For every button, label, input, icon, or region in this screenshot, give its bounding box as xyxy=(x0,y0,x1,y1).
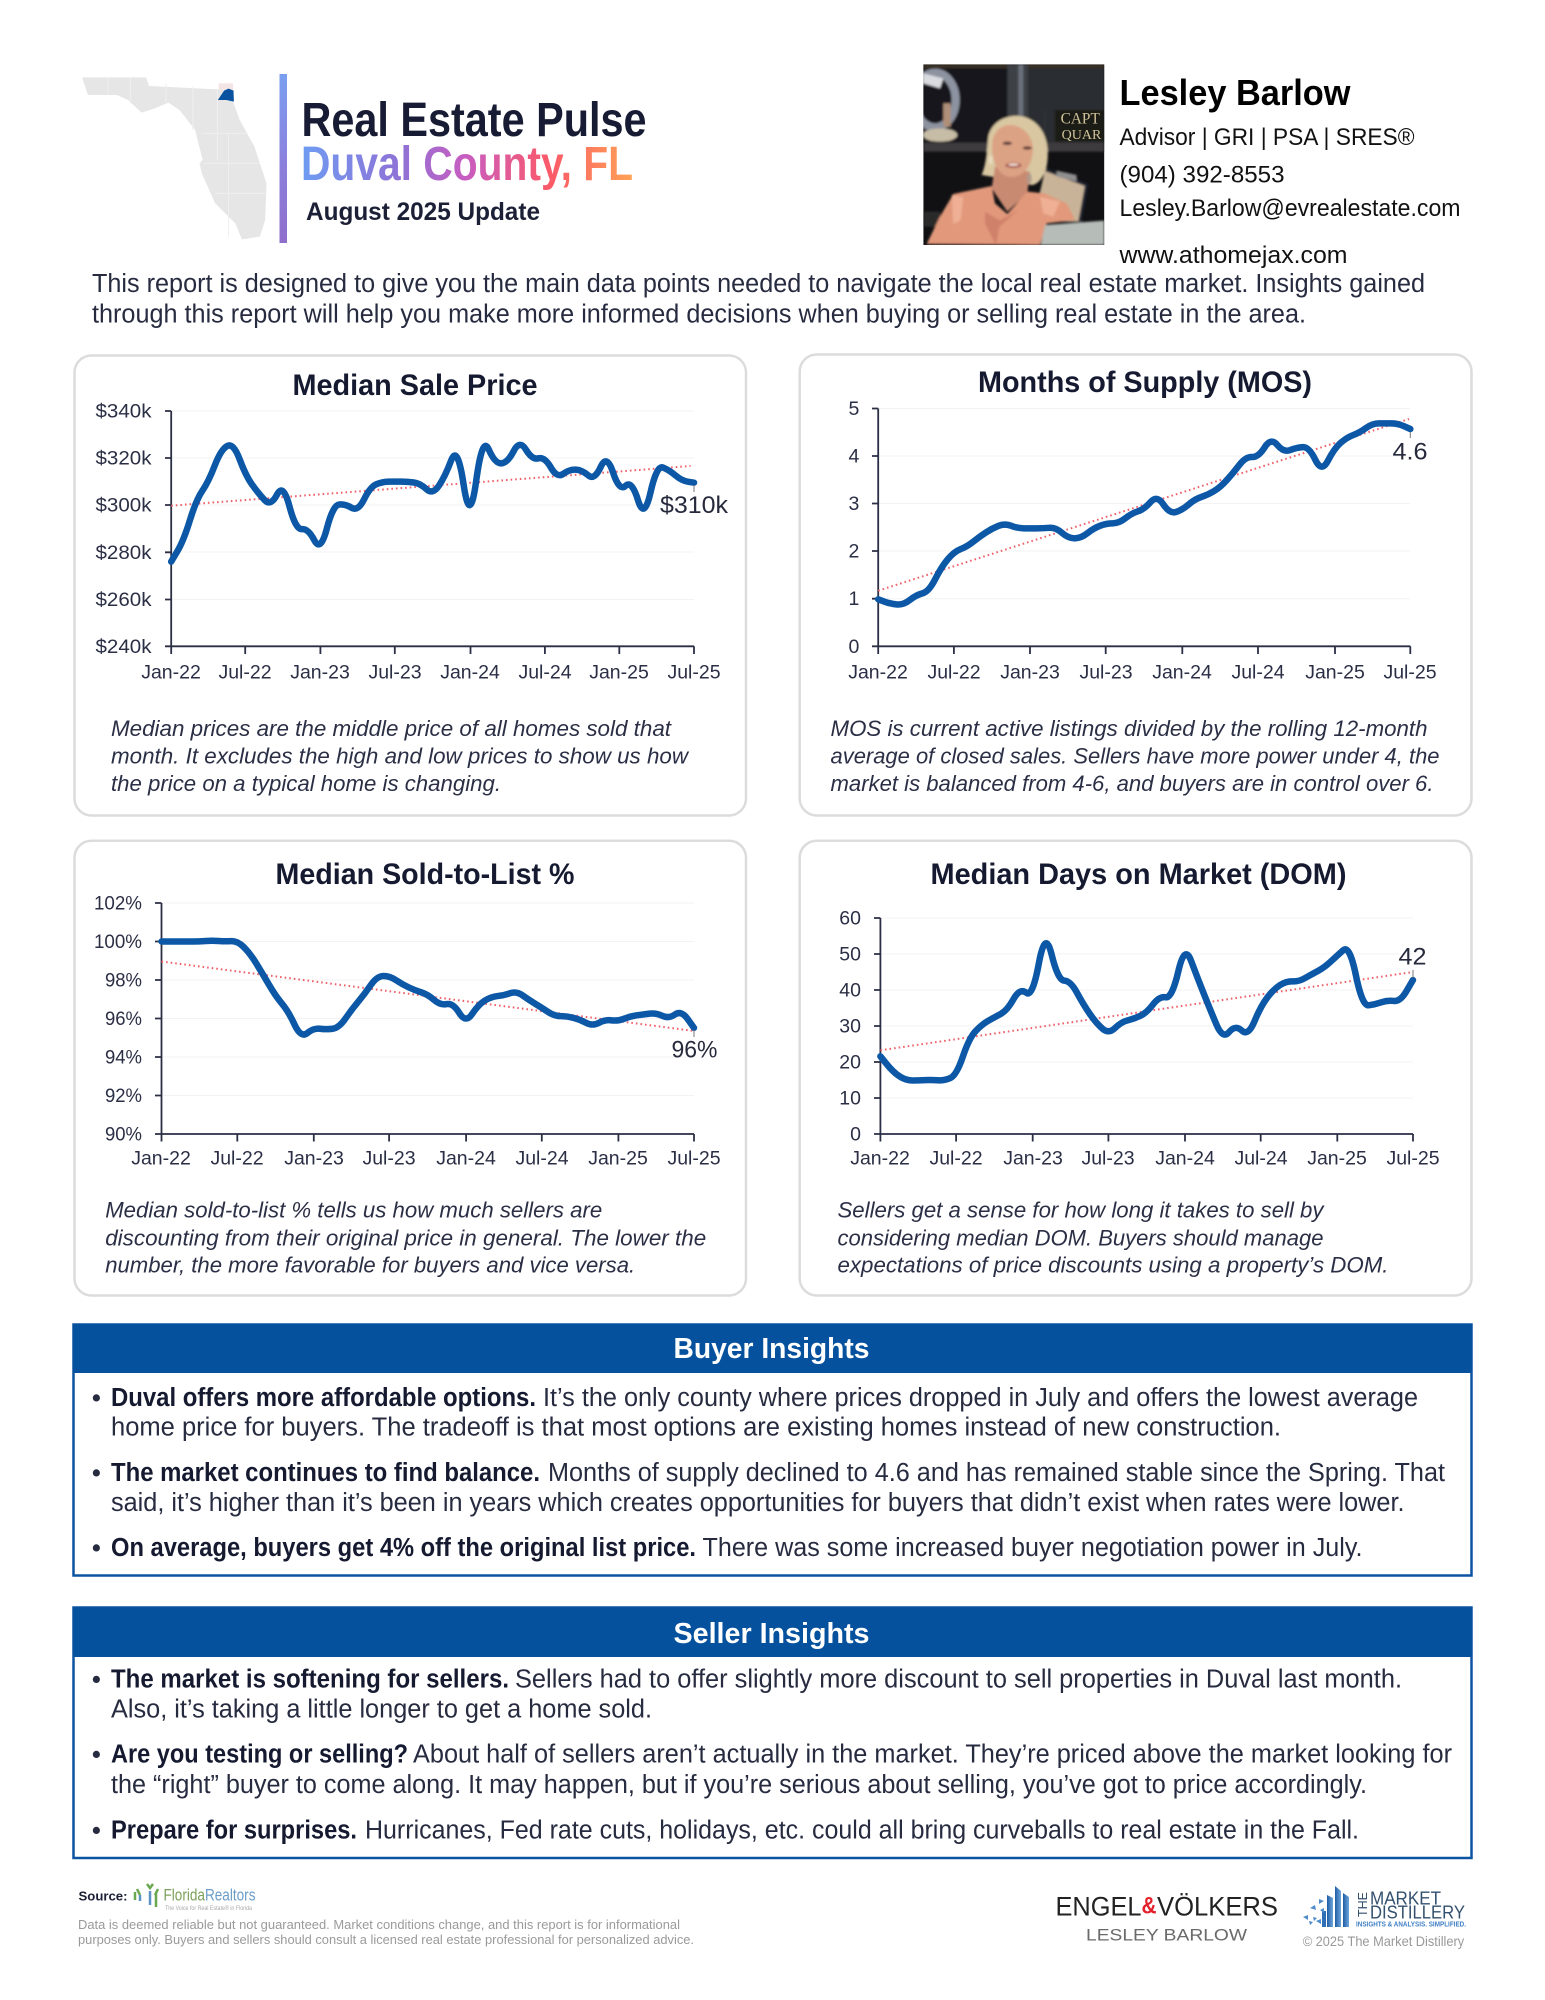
panel: Buyer Insights xyxy=(73,1324,1472,1576)
panel: Seller Insights xyxy=(73,1608,1472,1858)
description xyxy=(111,716,690,796)
bullet 3: On average, buyers get 4% off the original list price. xyxy=(111,1534,696,1562)
card xyxy=(74,841,746,1296)
description xyxy=(105,1198,706,1278)
y axis labels: 90% xyxy=(105,1124,142,1146)
x axis labels: Jan-23 xyxy=(284,1148,344,1170)
y axis labels: 4 xyxy=(848,446,859,468)
y axis labels: 60 xyxy=(839,908,861,930)
x axis labels: Jul-22 xyxy=(929,1148,983,1170)
x axis labels: Jul-25 xyxy=(1386,1148,1440,1170)
chart title: Months of Supply (MOS) xyxy=(978,366,1312,399)
data line xyxy=(162,941,694,1035)
bullet 2: • xyxy=(92,1740,101,1768)
description: expectations of price discounts using a property’s DOM. xyxy=(838,1252,1388,1278)
logo: Engel & Völkers: ENGEL xyxy=(1056,1892,1142,1922)
logo: Engel & Völkers xyxy=(1056,1892,1278,1944)
description: month. It excludes the high and low prices to show us how xyxy=(111,744,690,768)
data line xyxy=(880,943,1413,1080)
y axis labels: 96% xyxy=(105,1008,142,1030)
chart axes xyxy=(165,411,694,654)
data line xyxy=(171,445,694,562)
bullet 2: Are you testing or selling? xyxy=(111,1740,408,1768)
x axis labels: Jul-24 xyxy=(1234,1148,1288,1170)
disclaimer xyxy=(78,1917,694,1947)
bullet 2 xyxy=(92,1740,1453,1799)
agent photo: QUAR xyxy=(1062,128,1102,143)
agent photo: CAPT xyxy=(1061,110,1100,127)
bullet 3: • xyxy=(92,1534,101,1562)
x axis labels: Jan-25 xyxy=(589,662,649,684)
bullet 1: Sellers had to offer slightly more discount to sell properties in Duval last month. xyxy=(515,1666,1402,1694)
end value label: 4.6 xyxy=(1392,438,1428,466)
logo: Engel & Völkers: & xyxy=(1142,1892,1156,1920)
card xyxy=(74,356,746,816)
phone: (904) 392-8553 xyxy=(1120,162,1284,188)
heading: Seller Insights xyxy=(674,1618,870,1650)
disclaimer: Data is deemed reliable but not guaranteed. Market conditions change, and this report is for informational xyxy=(78,1917,680,1932)
box outline xyxy=(74,1608,1472,1858)
source label: Source: xyxy=(78,1888,128,1904)
trend line xyxy=(162,962,694,1031)
x axis labels: Jan-23 xyxy=(1003,1148,1063,1170)
agent name: Lesley Barlow xyxy=(1120,72,1351,113)
title line 2 gradient: Duval County, FL xyxy=(301,138,633,191)
card xyxy=(800,354,1472,816)
y axis labels: 2 xyxy=(848,540,859,562)
trend line xyxy=(171,466,691,506)
Florida Realtors wordmark: FloridaRealtors xyxy=(164,1886,256,1904)
chart axes xyxy=(155,903,694,1142)
y axis labels xyxy=(94,892,142,1146)
description: market is balanced from 4-6, and buyers are in control over 6. xyxy=(830,771,1434,796)
y axis labels xyxy=(848,398,859,658)
description: Median sold-to-list % tells us how much sellers are xyxy=(105,1198,602,1222)
box outline xyxy=(74,1324,1472,1576)
disclaimer: purposes only. Buyers and sellers should consult a licensed real estate professional for personalized advice. xyxy=(78,1932,694,1947)
bullet 3: Hurricanes, Fed rate cuts, holidays, etc. could all bring curveballs to real estate in the Fall. xyxy=(365,1816,1359,1844)
panel: Median Days on Market xyxy=(800,841,1472,1296)
x axis labels: Jan-22 xyxy=(131,1148,191,1170)
x axis labels: Jul-22 xyxy=(210,1148,264,1170)
x axis labels: Jul-24 xyxy=(515,1148,569,1170)
x axis labels: Jan-24 xyxy=(1152,662,1212,684)
bullet 2: The market continues to find balance. xyxy=(111,1459,540,1487)
y axis labels: 3 xyxy=(848,493,859,515)
x axis labels xyxy=(141,662,721,684)
trend line xyxy=(878,419,1409,591)
copyright: © 2025 The Market Distillery xyxy=(1303,1933,1464,1949)
bullet 1: It’s the only county where prices dropped in July and offers the lowest average xyxy=(543,1384,1418,1412)
description: average of closed sales. Sellers have more power under 4, the xyxy=(830,744,1440,768)
icon: Florida Realtors mark xyxy=(135,1884,158,1907)
x axis labels: Jan-25 xyxy=(588,1148,648,1170)
bullet 3: Prepare for surprises. xyxy=(111,1816,357,1844)
state silhouette xyxy=(82,77,267,239)
intro paragraph: through this report will help you make more informed decisions when buying or selling real estate in the area. xyxy=(92,300,1306,328)
y axis labels: 10 xyxy=(839,1088,861,1110)
logo: The Market Distillery xyxy=(1303,1886,1466,1949)
end value label: $310k xyxy=(660,492,729,519)
x axis labels: Jul-24 xyxy=(518,662,572,684)
date: August 2025 Update xyxy=(306,198,540,226)
x axis labels: Jul-25 xyxy=(667,1148,721,1170)
description: Sellers get a sense for how long it takes to sell by xyxy=(838,1198,1325,1222)
x axis labels: Jan-24 xyxy=(1155,1148,1215,1170)
y axis labels: $240k xyxy=(96,636,152,658)
x axis labels: Jul-25 xyxy=(667,662,721,684)
y axis labels: $260k xyxy=(96,589,152,611)
description: considering median DOM. Buyers should manage xyxy=(838,1226,1324,1250)
description: MOS is current active listings divided by the rolling 12-month xyxy=(830,716,1428,741)
description xyxy=(830,716,1440,796)
bullet 1: Also, it’s taking a little longer to get a home sold. xyxy=(111,1696,652,1724)
x axis labels: Jul-22 xyxy=(218,662,272,684)
y axis labels: 0 xyxy=(848,636,859,658)
y axis labels xyxy=(839,908,861,1146)
tagline: INSIGHTS & ANALYSIS. SIMPLIFIED. xyxy=(1356,1922,1466,1929)
logo: Engel & Völkers: VÖLKERS xyxy=(1157,1892,1278,1922)
MARKET: MARKET xyxy=(1370,1888,1441,1908)
x axis labels: Jul-24 xyxy=(1231,662,1285,684)
website: www.athomejax.com xyxy=(1118,242,1348,269)
x axis labels xyxy=(131,1148,721,1170)
x axis labels: Jul-23 xyxy=(1081,1148,1135,1170)
bullet 2: Months of supply declined to 4.6 and has remained stable since the Spring. That xyxy=(548,1459,1445,1487)
title block xyxy=(301,94,646,226)
data line xyxy=(878,423,1410,605)
x axis labels xyxy=(850,1148,1440,1170)
y axis labels: 40 xyxy=(839,980,861,1002)
x axis labels: Jul-23 xyxy=(368,662,422,684)
bullet 1 xyxy=(92,1384,1418,1442)
Florida Realtors tagline: The Voice for Real Estate® in Florida xyxy=(165,1904,252,1912)
heading: Buyer Insights xyxy=(674,1333,870,1365)
header: Florida map xyxy=(82,77,267,239)
y axis labels: 94% xyxy=(105,1046,142,1068)
chart axes xyxy=(872,408,1410,654)
bullet 1 xyxy=(92,1666,1402,1724)
x axis labels: Jan-22 xyxy=(141,662,201,684)
description: discounting from their original price in general. The lower the xyxy=(105,1226,706,1250)
header band xyxy=(73,1324,1472,1373)
y axis labels: 1 xyxy=(848,588,859,610)
credentials: Advisor | GRI | PSA | SRES® xyxy=(1120,124,1415,151)
chart axes xyxy=(874,918,1413,1142)
x axis labels: Jul-23 xyxy=(1079,662,1133,684)
intro paragraph xyxy=(92,270,1425,328)
agent photo xyxy=(914,64,1104,245)
y axis labels: $320k xyxy=(96,448,152,470)
bullet 2: the “right” buyer to come along. It may happen, but if you’re serious about selling, you’ve got to price accordingly. xyxy=(111,1771,1367,1799)
x axis labels: Jan-25 xyxy=(1305,662,1365,684)
y axis labels: 98% xyxy=(105,970,142,992)
bullet 2 xyxy=(92,1459,1445,1517)
x axis labels: Jan-24 xyxy=(440,662,500,684)
y axis labels: 102% xyxy=(94,892,142,914)
x axis labels: Jul-22 xyxy=(927,662,981,684)
y axis labels: $280k xyxy=(96,542,152,564)
description xyxy=(838,1198,1388,1278)
panel: Median Sale Price xyxy=(74,356,746,816)
email: Lesley.Barlow@evrealestate.com xyxy=(1120,195,1460,222)
chart title: Median Sale Price xyxy=(292,369,538,402)
x axis labels: Jan-23 xyxy=(290,662,350,684)
x axis labels: Jan-24 xyxy=(436,1148,496,1170)
bullet 3 xyxy=(92,1534,1362,1562)
THE: THE xyxy=(1355,1892,1370,1917)
bullet 1: • xyxy=(92,1384,101,1412)
description: the price on a typical home is changing. xyxy=(111,771,501,796)
description: number, the more favorable for buyers and vice versa. xyxy=(105,1252,635,1278)
y axis labels: $300k xyxy=(96,494,152,516)
trend line xyxy=(880,972,1413,1050)
source line xyxy=(78,1884,256,1912)
x axis labels: Jul-25 xyxy=(1383,662,1437,684)
icon: distillery towers xyxy=(1303,1886,1349,1927)
DISTILLERY: DISTILLERY xyxy=(1370,1902,1465,1922)
y axis labels: $340k xyxy=(96,400,152,422)
chart title: Median Sold-to-List % xyxy=(276,858,574,891)
end value label: 42 xyxy=(1398,944,1426,970)
bullet 3: There was some increased buyer negotiation power in July. xyxy=(702,1534,1362,1562)
y axis labels: 100% xyxy=(94,931,142,953)
panel: Months of Supply xyxy=(800,354,1472,816)
agent contact block xyxy=(1118,72,1460,269)
end value label: 96% xyxy=(672,1036,718,1064)
x axis labels: Jan-22 xyxy=(850,1148,910,1170)
bullet 1: The market is softening for sellers. xyxy=(111,1666,509,1694)
x axis labels: Jan-23 xyxy=(1000,662,1060,684)
x axis labels: Jul-23 xyxy=(362,1148,416,1170)
header band xyxy=(73,1608,1472,1657)
bullet 3: • xyxy=(92,1816,101,1844)
bullet 1: home price for buyers. The tradeoff is that most options are existing homes instead of new construction. xyxy=(111,1414,1281,1442)
card xyxy=(800,841,1472,1296)
description: Median prices are the middle price of all homes sold that xyxy=(111,716,673,741)
bullet 2: • xyxy=(92,1459,101,1487)
intro paragraph: This report is designed to give you the main data points needed to navigate the local real estate market. Insights gained xyxy=(92,270,1425,298)
Nassau county xyxy=(219,83,233,90)
bullet 1: • xyxy=(92,1666,101,1694)
y axis labels: 30 xyxy=(839,1016,861,1038)
y axis labels: 0 xyxy=(850,1124,861,1146)
logo: Engel & Völkers: LESLEY BARLOW xyxy=(1086,1926,1247,1944)
title line 1: Real Estate Pulse xyxy=(302,94,646,147)
x axis labels: Jan-25 xyxy=(1307,1148,1367,1170)
Duval county highlight xyxy=(218,89,234,102)
x axis labels: Jan-22 xyxy=(848,662,908,684)
bullet 2: said, it’s higher than it’s been in years which creates opportunities for buyers that didn’t exist when rates were lower. xyxy=(111,1489,1404,1517)
header accent bar xyxy=(280,74,287,243)
y axis labels: 50 xyxy=(839,944,861,966)
x axis labels xyxy=(848,662,1437,684)
y axis labels: 20 xyxy=(839,1052,861,1074)
chart title: Median Days on Market (DOM) xyxy=(930,858,1346,891)
panel: Median Sold-to-List xyxy=(74,841,746,1296)
bullet 2: About half of sellers aren’t actually in the market. They’re priced above the market looking for xyxy=(413,1740,1453,1768)
y axis labels: 92% xyxy=(105,1085,142,1107)
bullet 1: Duval offers more affordable options. xyxy=(111,1384,536,1412)
y axis labels xyxy=(96,400,152,658)
y axis labels: 5 xyxy=(848,398,859,420)
